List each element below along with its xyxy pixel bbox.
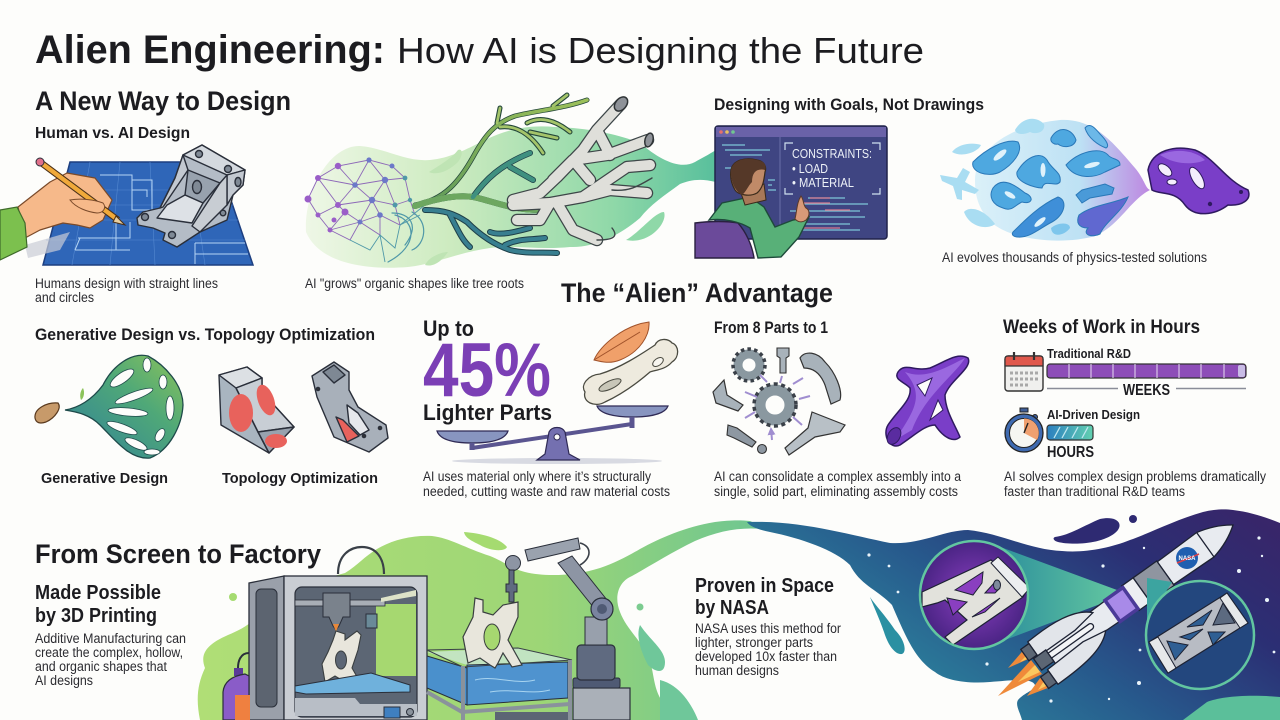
feather icon [594, 322, 649, 362]
text: additive manufacturing [35, 631, 186, 688]
control panel [295, 698, 417, 716]
panel heading: Generative Design vs. Topology Optimization [35, 325, 375, 344]
panel: weeks of work in hours [1003, 317, 1266, 499]
body text: AI can consolidate a complex assembly into a [714, 469, 961, 484]
seed icon [35, 403, 59, 423]
subheading: human vs AI design: Human vs. AI Design [35, 125, 190, 142]
subheading: made possible by 3D printing: by 3D Printing [35, 605, 157, 627]
illustration: neural network growing into organic roots and bone lattice [304, 94, 716, 268]
topology block with red stress zones [219, 367, 294, 453]
text: additive manufacturing: AI designs [35, 673, 93, 688]
hand [18, 173, 112, 238]
bar: weeks [1047, 364, 1246, 378]
bolt [777, 348, 789, 373]
light holes in candidates [992, 148, 1100, 228]
label: generative design: Generative Design [41, 470, 168, 487]
label: weeks: WEEKS [1123, 382, 1170, 399]
caption: humans design: Humans design with straight lines [35, 276, 218, 291]
green factory background wave [198, 520, 770, 720]
gears [733, 349, 796, 426]
generative organic lattice [65, 355, 183, 458]
body text: single, solid part, eliminating assembly costs [714, 484, 958, 499]
icon: calendar [1005, 352, 1043, 391]
held part [463, 598, 522, 668]
subheading: proven in space by NASA: Proven in Space [695, 575, 834, 597]
flat plate [785, 412, 845, 455]
robot base [573, 688, 630, 720]
label: hours: HOURS [1047, 444, 1094, 461]
stars [867, 536, 1275, 703]
text: NASA uses this method: NASA uses this method for [695, 621, 841, 636]
topology optimized part [312, 362, 388, 452]
arrows toward centre [745, 375, 810, 440]
hex bolt [727, 425, 756, 447]
blueprint sheet [43, 162, 253, 265]
body text: AI uses material only where it’s structurally [423, 469, 651, 484]
panel heading: From 8 Parts to 1 [714, 318, 828, 337]
dark dot [1129, 515, 1137, 523]
illustration: engineer at constraints screen [695, 126, 887, 258]
cloud behind candidates [975, 120, 1150, 241]
printer window [295, 587, 417, 717]
dark blob [1054, 518, 1120, 544]
label: AI-driven design: AI-Driven Design [1047, 408, 1140, 422]
body text [423, 469, 670, 499]
flames [998, 646, 1053, 696]
body text: needed, cutting waste and raw material costs [423, 484, 670, 499]
rocket body [1019, 505, 1249, 690]
curved bracket [800, 353, 841, 404]
illustration: evolving blue candidate designs to purple final part [940, 119, 1249, 241]
body text: faster than traditional R&D teams [1004, 484, 1185, 499]
thumb [70, 199, 105, 213]
printed part [322, 631, 361, 682]
caption: humans design [35, 276, 218, 305]
green sleeve [0, 207, 27, 260]
lens: rocket lattice detail [1146, 581, 1254, 689]
neural network nodes and links [308, 160, 425, 262]
tube openings [612, 94, 630, 114]
code screen: • MATERIAL [792, 175, 854, 190]
print head [323, 593, 350, 630]
text: additive manufacturing: Additive Manufacturing can [35, 631, 186, 646]
shadow under hand [25, 232, 70, 258]
heading: the Alien advantage: The “Alien” Advantage [561, 278, 833, 308]
green corner [1183, 696, 1280, 720]
printer body [249, 576, 284, 720]
balance scale [437, 406, 668, 464]
consolidated purple part [884, 356, 969, 447]
green flow ribbon [306, 126, 716, 268]
illustration: rocket [998, 505, 1249, 696]
washer [758, 444, 766, 454]
subheading: proven in space by NASA [695, 575, 834, 619]
part opening [484, 624, 500, 650]
grey machined bracket [137, 145, 245, 247]
panel: 45 percent lighter parts [423, 316, 678, 499]
Lighter Parts label: Lighter Parts [423, 400, 552, 425]
label: traditional R&D: Traditional R&D [1047, 347, 1131, 361]
text: additive manufacturing: create the complex, hollow, [35, 645, 183, 660]
caption: AI grows shapes: AI "grows" organic shapes like tree roots [305, 276, 524, 291]
text: NASA uses this method: lighter, stronger parts [695, 635, 813, 650]
illustration: post-processing tank and robot arm [427, 538, 630, 720]
code screen: • LOAD [792, 161, 828, 176]
panel: generative design vs topology optimization [35, 325, 388, 487]
subheading: proven in space by NASA: by NASA [695, 597, 769, 619]
exploded parts [713, 348, 845, 455]
code screen [715, 126, 887, 239]
text: NASA uses this method [695, 621, 841, 678]
lens: organic bracket detail [920, 541, 1030, 649]
icon: stopwatch [1005, 408, 1043, 452]
beam from rocket to second lens [1147, 578, 1172, 623]
filament tube [338, 547, 384, 574]
panel: from 8 parts to 1 [713, 318, 969, 499]
subheading: made possible by 3D printing [35, 582, 161, 627]
second tube opening [643, 132, 655, 148]
washing tank [427, 648, 572, 720]
purple chair [695, 222, 754, 258]
body text [1004, 469, 1266, 499]
title: Alien Engineering: [35, 28, 385, 72]
beam from rocket to first lens [995, 545, 1117, 640]
illustration: hand drawing a bracket on a blueprint [0, 145, 253, 265]
Up to label: Up to [423, 316, 474, 341]
caption: humans design: and circles [35, 290, 94, 305]
NASA badge: NASA [1178, 556, 1196, 562]
big stat 45%: 45% [423, 328, 551, 413]
caption: AI evolves: AI evolves thousands of physics-tested solutions [942, 250, 1207, 265]
angle bracket [713, 380, 743, 411]
body text [714, 469, 961, 499]
build plate [295, 673, 410, 694]
heading: from screen to factory: From Screen to Factory [35, 539, 321, 569]
candidate blobs [973, 126, 1128, 237]
panel heading: Weeks of Work in Hours [1003, 317, 1200, 338]
NASA badge [1176, 547, 1199, 569]
icon: resin bottle [223, 653, 250, 720]
pencil [36, 158, 125, 225]
heading: designing with goals: Designing with Goals, Not Drawings [714, 95, 984, 114]
text: NASA uses this method: human designs [695, 663, 779, 678]
illustration: 3D printer [249, 547, 427, 720]
engineer [709, 159, 809, 258]
bar: hours [1047, 425, 1093, 440]
space background wave [747, 509, 1280, 720]
text: NASA uses this method: developed 10x faster than [695, 649, 837, 664]
white bone lattice [513, 105, 652, 240]
title [35, 28, 924, 72]
code screen: CONSTRAINTS: [792, 146, 872, 161]
bone icon [583, 339, 678, 404]
title: How AI is Designing the Future [397, 30, 924, 71]
label: topology optimization: Topology Optimization [222, 470, 378, 487]
heading: a new way to design: A New Way to Design [35, 86, 291, 116]
teal drop [870, 597, 905, 654]
branching roots [388, 95, 587, 262]
purple optimized part [1148, 148, 1249, 214]
robot arm [506, 538, 620, 688]
text: additive manufacturing: and organic shapes that [35, 659, 167, 674]
subheading: made possible by 3D printing: Made Possible [35, 582, 161, 604]
